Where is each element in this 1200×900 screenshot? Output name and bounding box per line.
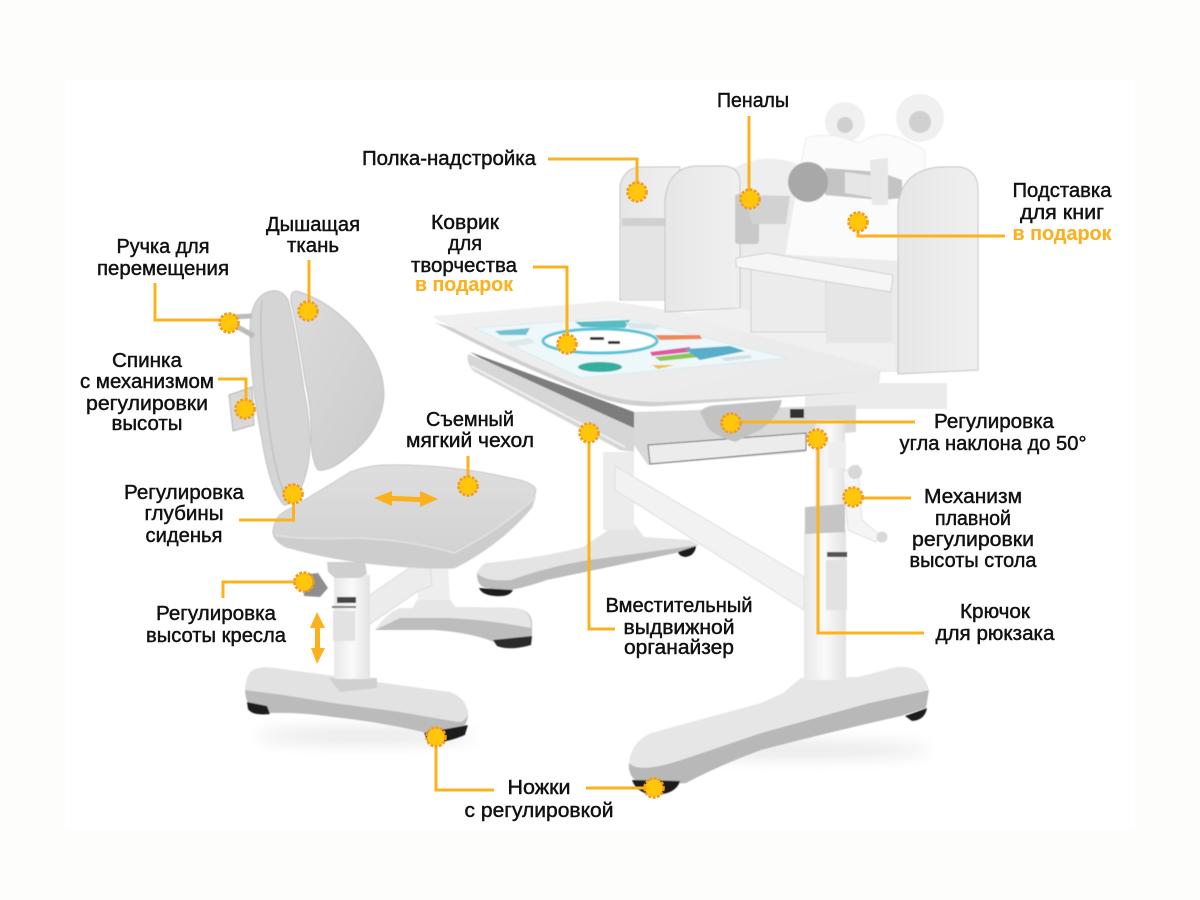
hutch floor bbox=[677, 308, 895, 372]
callout: Вместительный органайзер: Вместительный bbox=[606, 595, 752, 617]
callout: Регулировка глубины сиденья bbox=[124, 482, 302, 547]
callout: Крючок для рюкзака: для рюкзака bbox=[936, 623, 1055, 645]
callout: Крючок для рюкзака bbox=[808, 430, 1055, 645]
left panel shelf bbox=[622, 218, 665, 226]
callout: Коврик для творчества: Коврик bbox=[431, 212, 499, 234]
callout: Механизм регулировки высоты стола: регулировки bbox=[912, 529, 1034, 551]
book stand bbox=[785, 94, 944, 262]
callout: Механизм регулировки высоты стола: высоты стола bbox=[910, 550, 1037, 572]
callout: Коврик для творчества: творчества bbox=[411, 255, 518, 277]
callout: Ручка для перемещения: Ручка для bbox=[116, 236, 210, 258]
callout: Коврик для творчества bbox=[411, 212, 576, 354]
callout: Коврик для творчества: для bbox=[448, 233, 482, 255]
height crank bbox=[843, 465, 888, 542]
backrest height bracket bbox=[229, 387, 254, 431]
rear support bbox=[805, 383, 947, 409]
left lower compartment bbox=[622, 224, 664, 300]
callout: Вместительный органайзер: органайзер bbox=[624, 637, 734, 659]
callout: Регулировка глубины сиденья: Регулировка bbox=[124, 482, 245, 504]
double arrow: chair height bbox=[310, 612, 325, 664]
chair rear base bbox=[375, 566, 532, 648]
hutch back panel bbox=[740, 172, 900, 372]
callout: Спинка с механизмом: регулировки bbox=[86, 393, 208, 415]
callout: Ручка для перемещения: перемещения bbox=[97, 258, 229, 280]
shelf lower wall bbox=[826, 283, 892, 343]
callout: Регулировка глубины сиденья: глубины bbox=[144, 503, 224, 525]
callout: Ножки с регулировкой: с регулировкой bbox=[464, 800, 614, 822]
callout: Регулировка высоты кресла: Регулировка bbox=[156, 603, 277, 625]
rear desk leg bbox=[603, 452, 634, 530]
callout: Подставка для книг bbox=[848, 180, 1112, 245]
desk illustration bbox=[434, 94, 978, 795]
callout: Полка-надстройка: Полка-надстройка bbox=[362, 148, 537, 170]
callout: Спинка с механизмом: высоты bbox=[112, 413, 182, 435]
callout: Спинка с механизмом: Спинка bbox=[112, 350, 183, 372]
chair backrest rear pad bbox=[250, 291, 310, 505]
front desk foot bbox=[629, 667, 929, 795]
callout: Механизм регулировки высоты стола: плавной bbox=[935, 508, 1011, 530]
callout: Подставка для книг: Подставка bbox=[1012, 180, 1112, 202]
white background panel bbox=[65, 80, 1135, 830]
left front panel bbox=[665, 166, 740, 312]
callout: Механизм регулировки высоты стола bbox=[844, 486, 1037, 572]
callout: Спинка с механизмом bbox=[80, 350, 254, 435]
callout: Регулировка высоты кресла bbox=[146, 572, 314, 647]
chair column bbox=[327, 562, 370, 679]
callout: Спинка с механизмом: с механизмом bbox=[80, 371, 214, 393]
carry handle bbox=[232, 316, 254, 336]
chair diagonal strut bbox=[367, 564, 432, 624]
callout: Ручка для перемещения bbox=[97, 236, 238, 332]
rear desk foot bbox=[477, 525, 699, 596]
callout: Пеналы bbox=[717, 90, 789, 208]
callout: Механизм регулировки высоты стола: Механизм bbox=[924, 486, 1022, 508]
callout: Регулировка глубины сиденья: сиденья bbox=[146, 525, 222, 547]
callout: Дышащая ткань bbox=[266, 214, 360, 320]
drawer rail bbox=[468, 352, 634, 452]
callout: Съемный мягкий чехол: мягкий чехол bbox=[406, 430, 534, 452]
desk diagonal beam bbox=[615, 466, 804, 610]
callout: Регулировка угла наклона: Регулировка bbox=[934, 411, 1055, 433]
callout: Регулировка высоты кресла: высоты кресла bbox=[146, 625, 287, 647]
callout: Съемный мягкий чехол: Съемный bbox=[426, 409, 514, 431]
pencil holders bbox=[735, 194, 790, 244]
chair backrest front pad bbox=[291, 291, 384, 470]
hutch shelf bbox=[736, 253, 893, 292]
chair front base bbox=[245, 667, 468, 742]
callout: Ножки с регулировкой bbox=[426, 728, 664, 822]
desk floor shadow bbox=[650, 742, 930, 758]
callout: Пеналы: Пеналы bbox=[717, 90, 789, 112]
right panel bbox=[898, 167, 978, 374]
callout: Дышащая ткань: Дышащая bbox=[266, 214, 360, 236]
chair seat bbox=[273, 465, 536, 568]
callout: Регулировка угла наклона: угла наклона до 50° bbox=[900, 433, 1086, 455]
callout: Крючок для рюкзака: Крючок bbox=[960, 601, 1030, 623]
callout: Регулировка угла наклона bbox=[722, 411, 1086, 455]
chair height knob bbox=[302, 573, 328, 597]
callout: Подставка для книг: в подарок bbox=[1012, 223, 1112, 245]
callout: Дышащая ткань: ткань bbox=[287, 235, 339, 257]
callout: Коврик для творчества: в подарок bbox=[415, 274, 514, 296]
callout: Вместительный органайзер: выдвижной bbox=[624, 617, 734, 639]
shelf support bbox=[751, 270, 826, 332]
chair floor shadow bbox=[255, 729, 475, 743]
callout: Съемный мягкий чехол bbox=[406, 409, 534, 496]
desk top bbox=[434, 301, 880, 406]
callout: Ножки с регулировкой: Ножки bbox=[508, 777, 570, 799]
double arrow: seat depth bbox=[374, 491, 438, 507]
creative mat bbox=[474, 317, 788, 378]
callout: Подставка для книг: для книг bbox=[1020, 202, 1104, 224]
left rear panel bbox=[620, 167, 680, 300]
desk mechanism bbox=[634, 400, 856, 465]
chair illustration bbox=[229, 291, 536, 743]
hutch back arch bbox=[730, 159, 800, 200]
front desk leg bbox=[804, 420, 847, 680]
callout: Полка-надстройка bbox=[362, 148, 646, 202]
callout: Вместительный органайзер bbox=[580, 424, 752, 659]
